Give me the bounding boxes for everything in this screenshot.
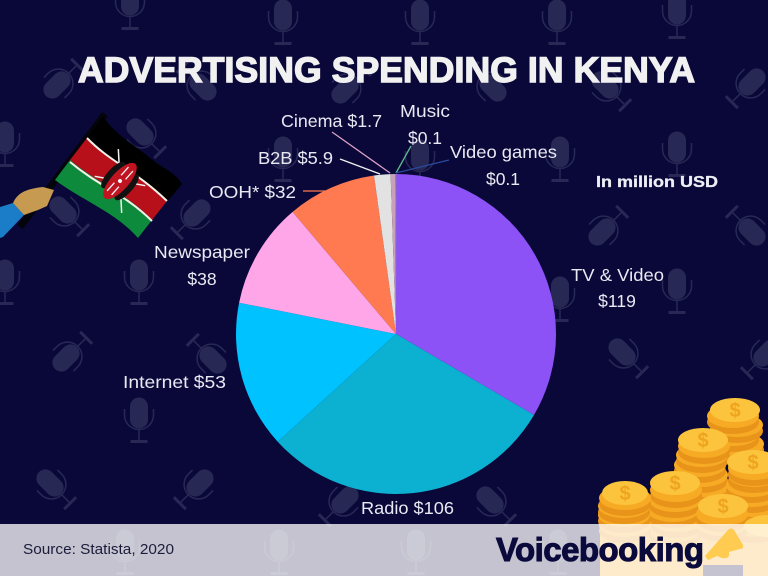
coin stack right: $ xyxy=(747,452,759,474)
arm xyxy=(0,203,24,238)
hand xyxy=(13,187,54,215)
flag black stripe xyxy=(87,116,182,202)
slice: Internet xyxy=(236,303,396,442)
flag white fimbriations xyxy=(70,138,167,221)
coin stack front: $ xyxy=(717,496,729,518)
slice: B2B xyxy=(374,174,396,334)
slice: Cinema xyxy=(391,174,396,334)
coin stack top right: $ xyxy=(729,400,741,422)
coin stack back middle xyxy=(674,428,733,523)
flag green stripe xyxy=(55,160,152,238)
leader lines xyxy=(303,132,449,191)
label: TV & Video value: $119 xyxy=(598,291,636,311)
slice: Newspaper xyxy=(239,212,396,334)
source note: Source: Statista, 2020 xyxy=(23,542,174,558)
slice: Radio xyxy=(278,334,534,494)
coin stack middle xyxy=(647,471,703,548)
title: ADVERTISING SPENDING IN KENYA xyxy=(78,50,695,90)
coin stack middle: $ xyxy=(669,473,681,495)
shield and spears xyxy=(63,124,177,238)
label: Newspaper: Newspaper xyxy=(154,242,250,262)
label: Radio: Radio $106 xyxy=(361,498,454,518)
label: B2B: B2B $5.9 xyxy=(258,148,333,168)
unit note: In million USD xyxy=(596,174,718,191)
flag red stripe xyxy=(70,138,167,220)
coin stack top right xyxy=(707,398,764,462)
flag pole xyxy=(20,114,105,227)
label: TV & Video: TV & Video xyxy=(571,265,664,285)
label: Video games: Video games xyxy=(450,142,557,162)
slice: TV & Video xyxy=(396,174,556,415)
coin stack front right xyxy=(744,515,768,537)
labels xyxy=(123,101,664,518)
label: Video games value: $0.1 xyxy=(486,169,520,189)
label: Music: Music xyxy=(400,101,450,121)
icon: megaphone xyxy=(705,528,743,560)
label: Internet: Internet $53 xyxy=(123,372,226,392)
coin mass behind footer xyxy=(600,520,768,576)
coin stack left xyxy=(598,481,651,543)
coin stack front xyxy=(696,494,748,542)
coin stack right xyxy=(726,450,768,543)
icon: stacks of gold coins xyxy=(598,398,768,576)
coin stack left: $ xyxy=(619,483,631,505)
pie chart xyxy=(236,174,556,494)
label: OOH: OOH* $32 xyxy=(209,182,296,202)
slice: OOH xyxy=(293,176,396,334)
slice: Music and Video games xyxy=(395,174,396,334)
icon: hand holding Kenyan flag xyxy=(0,114,182,238)
footer band xyxy=(0,524,768,576)
label: Cinema: Cinema $1.7 xyxy=(281,111,382,131)
label: Music value: $0.1 xyxy=(408,128,442,148)
coin stack back middle: $ xyxy=(697,430,709,452)
logo wordmark: Voicebooking xyxy=(496,531,704,568)
label: Newspaper value: $38 xyxy=(187,269,217,289)
